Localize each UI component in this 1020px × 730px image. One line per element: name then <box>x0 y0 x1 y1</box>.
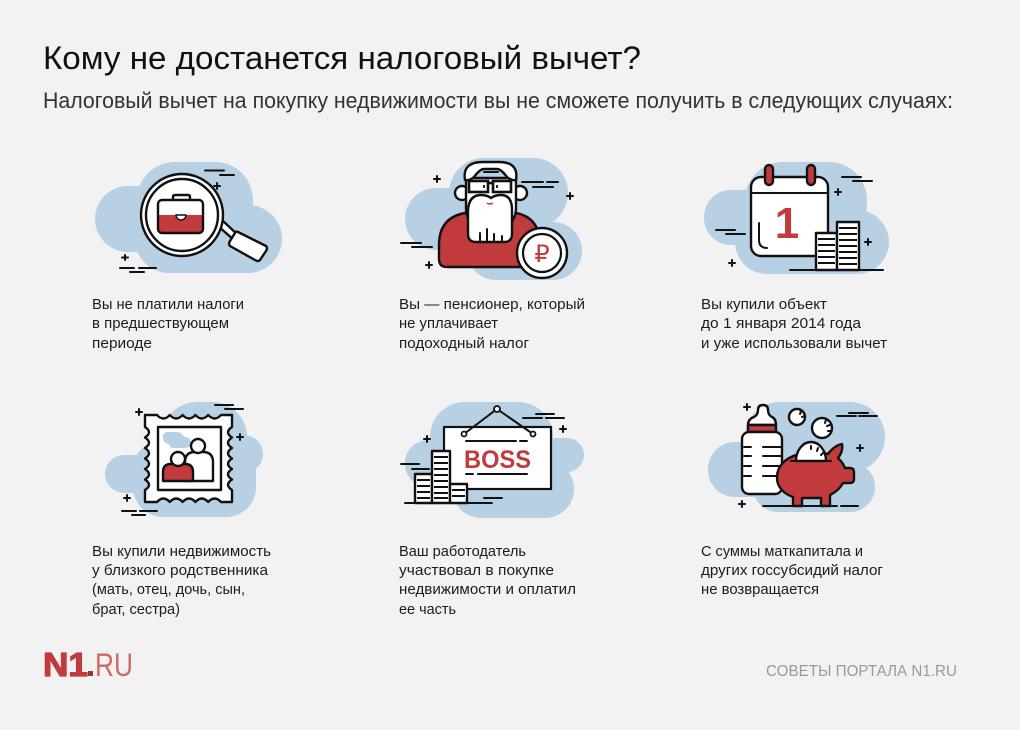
icon background cloud <box>704 162 889 274</box>
magnifier lens <box>141 174 223 256</box>
coin in slot <box>796 442 826 461</box>
text: pensioner: Вы — пенсионер, который <box>399 297 585 313</box>
text: bought from relatives: Вы купили недвижимость <box>92 544 271 560</box>
magnifier handle <box>218 221 267 261</box>
text: no taxes paid: Вы не платили налоги <box>92 297 244 313</box>
calendar: 1 <box>775 199 799 248</box>
logo: N1.RU <box>43 646 133 683</box>
text: bought from relatives: у близкого родственника <box>92 563 269 579</box>
hanging sign <box>444 406 551 489</box>
person: small red <box>163 452 193 481</box>
title: Кому не достанется налоговый вычет? <box>43 40 641 76</box>
coin stacks <box>816 222 859 270</box>
red body <box>439 212 540 267</box>
text: employer paid: недвижимости и оплатил <box>399 582 576 598</box>
text: maternity capital <box>701 544 883 598</box>
text: maternity capital: С суммы маткапитала и <box>701 544 863 560</box>
ears <box>455 186 527 200</box>
icon background cloud <box>95 162 282 273</box>
panel: employer paid <box>399 402 584 618</box>
icon background cloud <box>405 158 582 280</box>
floating coins <box>789 409 832 438</box>
calendar <box>751 165 828 256</box>
text: pensioner: подоходный налог <box>399 336 529 352</box>
panel: pensioner <box>399 158 585 352</box>
piggy bank <box>777 444 854 506</box>
text: bought before 2014: до 1 января 2014 года <box>701 316 862 332</box>
beard <box>468 195 512 242</box>
briefcase <box>158 195 203 233</box>
person: large <box>185 439 213 481</box>
icon background cloud <box>708 402 885 512</box>
coin stacks <box>415 451 467 503</box>
text: employer paid <box>399 544 576 618</box>
baby bottle <box>742 405 782 494</box>
text: bought before 2014 <box>701 297 887 352</box>
text: pensioner: не уплачивает <box>399 316 498 332</box>
hanging sign: BOSS <box>464 446 531 474</box>
icon: old man with ruble coin <box>401 158 582 280</box>
glasses <box>469 181 511 192</box>
icon background cloud <box>405 402 584 518</box>
stamp frame <box>145 415 232 502</box>
logo: N1.RU: RU <box>95 647 133 683</box>
panel: maternity capital <box>701 402 885 598</box>
footer note: СОВЕТЫ ПОРТАЛА N1.RU <box>766 663 957 680</box>
text: no taxes paid: периоде <box>92 336 152 352</box>
picture frame <box>158 427 221 490</box>
text: employer paid: ее часть <box>399 602 456 618</box>
ruble coin: ₽ <box>534 241 550 268</box>
icon: family stamp <box>105 402 263 517</box>
icon: baby bottle and piggy bank <box>708 402 885 512</box>
text: no taxes paid <box>92 297 244 352</box>
text: maternity capital: не возвращается <box>701 582 819 598</box>
panel: no taxes paid <box>92 162 282 352</box>
subtitle: Налоговый вычет на покупку недвижимости вы не сможете получить в следующих случаях: <box>43 88 953 113</box>
icon: magnifier over briefcase <box>95 162 282 273</box>
text: no taxes paid: в предшествующем <box>92 316 229 332</box>
ruble coin <box>517 228 567 278</box>
panel: bought before 2014 <box>701 162 889 352</box>
text: maternity capital: других госсубсидий налог <box>701 563 883 579</box>
text: bought from relatives <box>92 544 271 618</box>
logo: N1.RU: N1 <box>43 646 88 683</box>
icon: calendar and coins <box>704 162 889 274</box>
text: bought before 2014: и уже использовали вычет <box>701 336 887 352</box>
small cloud in picture <box>163 432 191 448</box>
text: bought from relatives: брат, сестра) <box>92 602 180 618</box>
text: employer paid: участвовал в покупке <box>399 563 554 579</box>
face <box>466 178 516 228</box>
text: bought before 2014: Вы купили объект <box>701 297 827 313</box>
text: pensioner <box>399 297 585 352</box>
text: bought from relatives: (мать, отец, дочь, сын, <box>92 582 245 598</box>
icon: boss sign and coins <box>401 402 584 518</box>
text: employer paid: Ваш работодатель <box>399 544 526 560</box>
icon background cloud <box>105 402 263 517</box>
hair <box>465 162 516 180</box>
panel: bought from relatives <box>92 402 271 618</box>
